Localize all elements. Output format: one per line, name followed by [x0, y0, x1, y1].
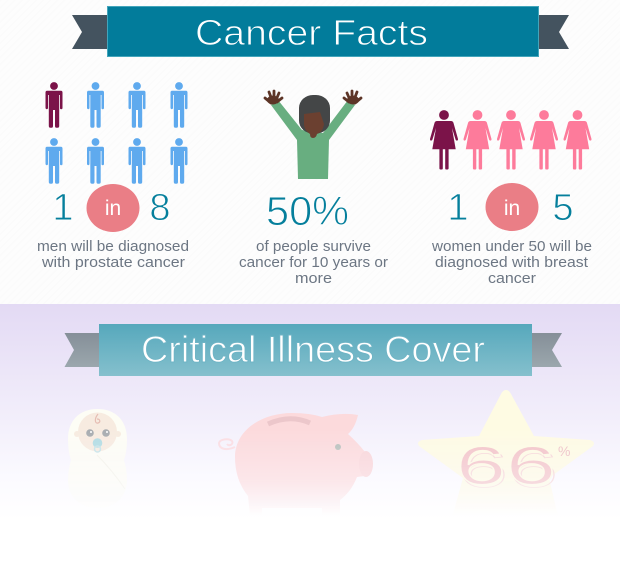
number: 50%: 50%: [266, 188, 349, 234]
heading: Critical Illness Cover: Critical Illness Cover: [141, 329, 485, 370]
badge: in: [86, 184, 140, 232]
faded icons row: [68, 390, 594, 502]
description: women: [431, 238, 592, 287]
icon: star with 66 percent: [418, 390, 594, 498]
description: men: [37, 238, 189, 271]
description: survive: cancer for 10 years or: [239, 254, 388, 271]
icon: five women: [430, 110, 592, 170]
description: survive: of people survive: [256, 238, 371, 255]
description: women: diagnosed with breast: [435, 254, 589, 271]
description: women: women under 50 will be: [431, 238, 592, 255]
section background: [0, 304, 620, 520]
description: women: cancer: [488, 270, 536, 287]
icon: eight men: [46, 82, 188, 184]
stat: 1 in 5 women: [430, 110, 592, 287]
badge: in: [486, 183, 538, 231]
icon: piggy bank: [218, 413, 373, 502]
description: survive: more: [295, 270, 332, 287]
badge: in: in: [504, 197, 520, 220]
badge: in: in: [105, 197, 121, 220]
number: 66: [462, 447, 555, 488]
stat: 50 percent survive: [239, 91, 388, 287]
icon: person with raised arms: [265, 91, 361, 179]
panel: critical illness cover: [0, 304, 620, 502]
description: men: with prostate cancer: [41, 254, 185, 271]
icon: swaddled baby: [68, 409, 127, 489]
banner: critical illness cover: [64, 324, 562, 376]
symbol: percent: %: [558, 443, 570, 459]
number: 66: 66: [456, 436, 556, 496]
stat: 1 in 8 men: [37, 82, 189, 271]
rect below fade: [0, 518, 620, 581]
number: 1: 1: [447, 187, 469, 229]
number: 8: 8: [149, 187, 171, 229]
number: 5: 5: [552, 187, 574, 229]
description: survive: [239, 238, 388, 287]
banner: cancer facts: [72, 6, 569, 57]
panel: cancer facts: [37, 6, 592, 287]
description: men: men will be diagnosed: [37, 238, 189, 255]
heading: Cancer Facts: Cancer Facts: [195, 12, 428, 53]
number: 66: 66: [458, 439, 558, 499]
number: 1: 1: [52, 187, 74, 229]
